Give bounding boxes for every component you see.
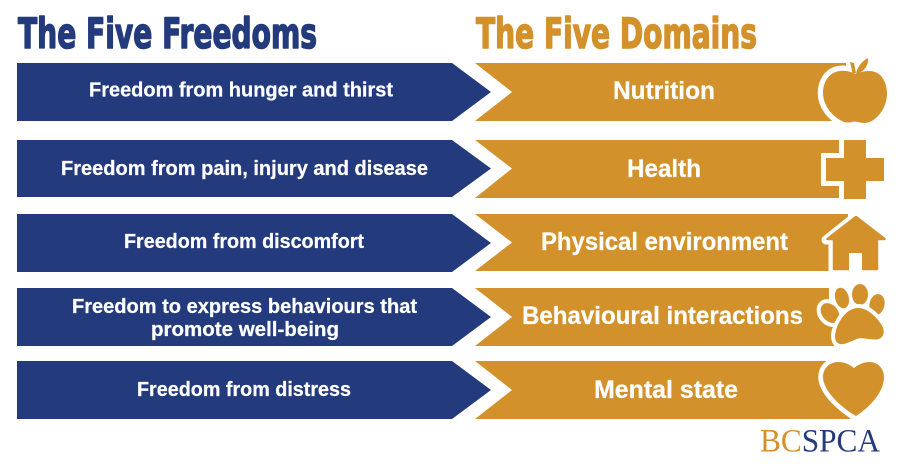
blue arrow: freedom from discomfort: Freedom from discomfort: [124, 230, 364, 253]
blue arrow: freedom from pain, injury and disease: [17, 140, 491, 197]
row 3: discomfort to physical environment: [17, 214, 886, 272]
row 2: pain to health: [17, 140, 884, 199]
gold arrow: behavioural interactions: Behavioural interactions: [522, 302, 803, 330]
icon: paw print: [817, 284, 887, 344]
icon: heart: [823, 362, 884, 416]
heading: The Five Freedoms: The Five Freedoms: [18, 9, 317, 58]
gold arrow: nutrition: Nutrition: [613, 77, 715, 105]
gold arrow: behavioural interactions: [475, 288, 834, 346]
row 5: distress to mental state: [17, 361, 884, 419]
logo: BCSPCA: BCSPCA: [760, 424, 880, 460]
gold arrow: health: Health: [627, 155, 701, 183]
blue arrow: freedom to express behaviours: promote well-being: [151, 318, 339, 341]
gold arrow: health: [475, 140, 850, 198]
icon: house: [826, 216, 886, 271]
blue arrow: freedom from discomfort: [17, 214, 491, 272]
blue arrow: freedom to express behaviours: [17, 288, 491, 346]
row 4: behaviours to behavioural interactions: [17, 284, 887, 346]
blue arrow: freedom from hunger and thirst: Freedom from hunger and thirst: [89, 78, 393, 102]
gold arrow: mental state: [475, 361, 850, 419]
blue arrow: freedom from distress: [17, 361, 491, 419]
icon: apple: [823, 58, 887, 123]
icon: medical cross: [826, 140, 884, 199]
blue arrow: freedom from distress: Freedom from distress: [137, 378, 351, 401]
blue arrow: freedom to express behaviours: Freedom to express behaviours that: [72, 295, 417, 318]
gold arrow: physical environment: Physical environment: [541, 228, 789, 256]
gold arrow: nutrition: [475, 63, 846, 121]
blue arrow: freedom from pain, injury and disease: Freedom from pain, injury and disease: [61, 157, 428, 180]
gold arrow: physical environment: [475, 214, 848, 271]
blue arrow: freedom from hunger and thirst: [17, 63, 491, 121]
gold arrow: mental state: Mental state: [594, 376, 738, 404]
row 1: hunger to nutrition: [17, 58, 887, 123]
heading: The Five Domains: The Five Domains: [476, 9, 757, 58]
